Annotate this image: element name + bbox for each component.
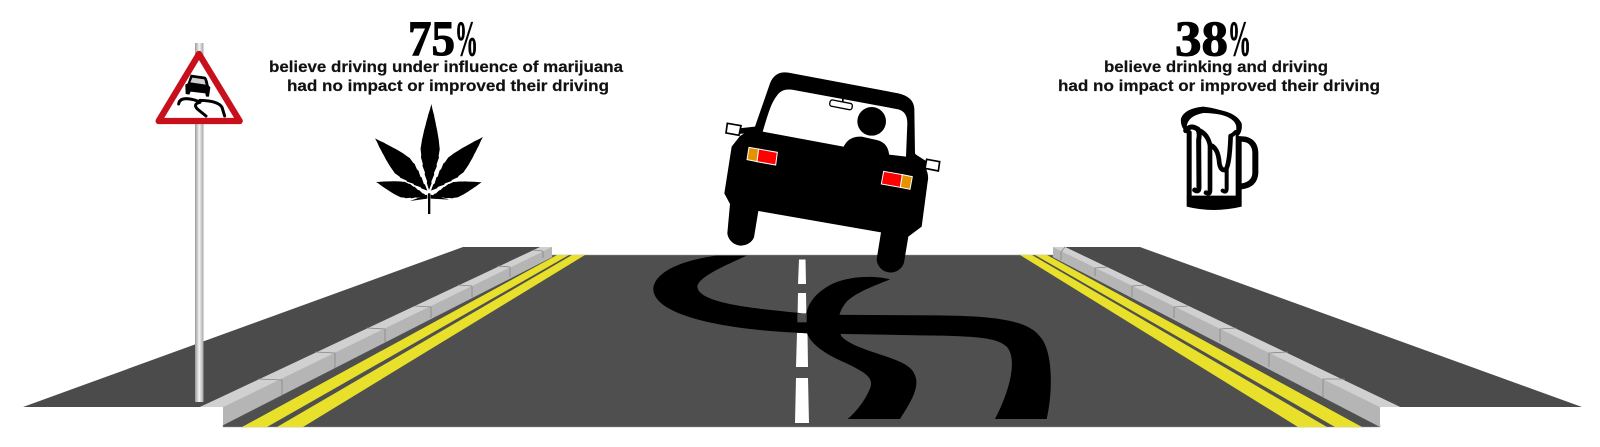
drinking caption: had no impact or improved their driving <box>1058 78 1380 95</box>
text: % <box>1228 10 1251 66</box>
sign car <box>185 75 210 97</box>
mug silhouette <box>1181 107 1258 210</box>
skid marks <box>653 256 1051 419</box>
slippery road warning sign <box>159 54 240 121</box>
handle opening <box>1242 142 1252 183</box>
road surface <box>223 255 1380 427</box>
marijuana caption: had no impact or improved their driving <box>287 78 609 95</box>
foam drips <box>1186 127 1236 193</box>
foam and glass interior <box>1187 113 1236 196</box>
car body silhouette <box>724 72 928 272</box>
car tilting over the road <box>724 72 940 272</box>
marijuana caption: believe driving under influence of marijuana <box>269 59 623 76</box>
icon: beer mug <box>1181 107 1258 210</box>
windscreen <box>763 89 907 157</box>
icon: marijuana leaf <box>367 104 491 214</box>
drinking caption: believe drinking and driving <box>1104 59 1328 76</box>
left side mirror <box>726 123 755 135</box>
right side mirror <box>915 154 940 171</box>
rear-view mirror <box>829 98 853 110</box>
left kerb <box>200 247 552 425</box>
double yellow lines left <box>242 255 585 427</box>
left sidewalk <box>23 247 552 407</box>
right tail light <box>881 171 912 189</box>
road sign post <box>195 43 204 402</box>
drinking caption <box>1058 59 1380 95</box>
stat: 38%: 38 <box>1175 10 1228 66</box>
stat: 38% <box>1175 10 1251 66</box>
driver <box>843 107 889 158</box>
right kerb <box>1053 247 1400 427</box>
marijuana caption <box>269 59 623 95</box>
stat: 75%: 75 <box>408 10 455 66</box>
centre line dashes <box>795 260 809 423</box>
text: % <box>455 10 478 66</box>
left tail light <box>747 147 777 165</box>
double yellow lines right <box>1020 255 1362 427</box>
sign skid <box>179 99 225 116</box>
right sidewalk <box>1065 247 1582 407</box>
